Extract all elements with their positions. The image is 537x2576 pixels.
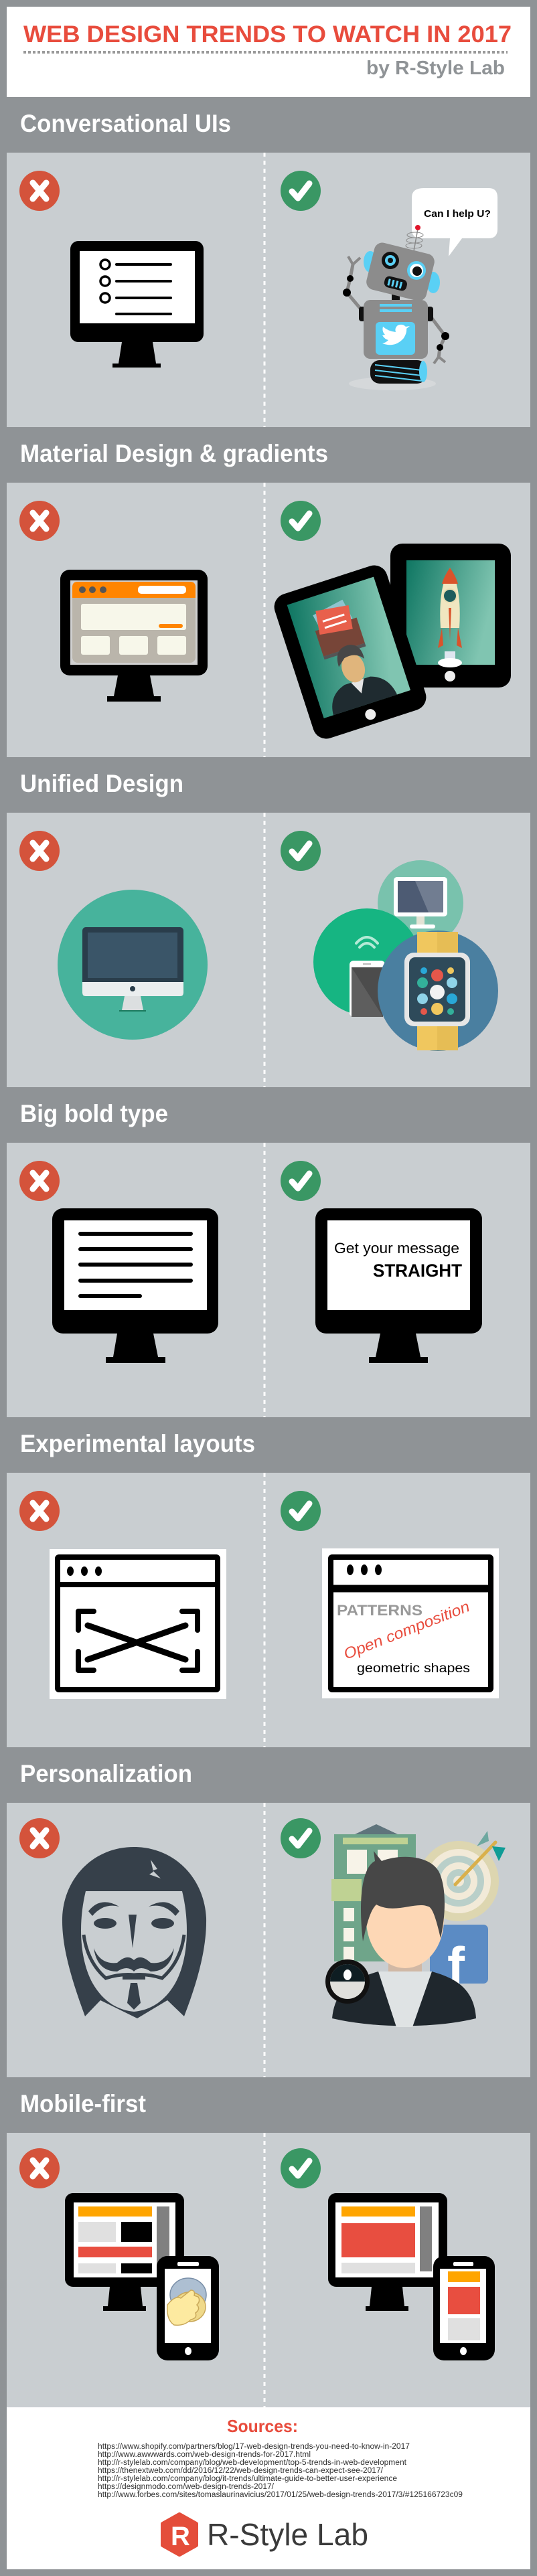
heading: Conversational UIs — [20, 110, 231, 137]
source links: https://www.shopify.com/partners/blog/17-web-design-trends-you-need-to-know-in-2017 — [98, 2443, 410, 2451]
monitor with big message: STRAIGHT — [373, 1261, 462, 1281]
section: Personalization — [7, 1760, 530, 2077]
window with experimental composition: PATTERNS — [337, 1602, 423, 1619]
monitor with small text lines — [52, 1208, 218, 1363]
desktop only circle — [58, 890, 208, 1040]
icon: cross — [19, 171, 60, 211]
window with experimental composition: geometric shapes — [357, 1662, 470, 1676]
section: Unified Design — [7, 770, 530, 1087]
logo: R-Style Lab — [207, 2517, 368, 2552]
icon: check — [281, 1818, 321, 1858]
mobile-first devices — [328, 2193, 495, 2360]
icon: check — [281, 1161, 321, 1201]
sources heading: Sources: — [227, 2416, 298, 2436]
window with experimental composition — [322, 1548, 499, 1698]
icon: cross — [19, 1818, 60, 1858]
source links: http://r-stylelab.com/company/blog/web-development/top-5-trends-in-web-development — [98, 2459, 407, 2467]
header — [7, 7, 530, 97]
icon: check — [281, 831, 321, 871]
source links: http://www.awwwards.com/web-design-trends-for-2017.html — [98, 2451, 311, 2459]
heading: Experimental layouts — [20, 1430, 255, 1457]
personalized user illustration — [325, 1824, 506, 2027]
section: Conversational UIs — [7, 110, 530, 427]
icon: check — [281, 171, 321, 211]
heading: Personalization — [20, 1760, 192, 1787]
icon: check — [281, 2148, 321, 2188]
icon: check — [281, 1491, 321, 1531]
window with expand arrows — [50, 1549, 226, 1699]
logo: R — [171, 2522, 190, 2551]
source links: http://r-stylelab.com/company/blog/it-trends/ultimate-guide-to-better-user-experience — [98, 2475, 397, 2483]
monitor with big message — [315, 1208, 482, 1363]
heading: Material Design & gradients — [20, 440, 328, 467]
source links: https://designmodo.com/web-design-trends-2017/ — [98, 2483, 275, 2491]
heading: Big bold type — [20, 1100, 168, 1127]
monitor with big message: Get your message — [334, 1240, 459, 1257]
section: Big bold type — [7, 1100, 530, 1417]
monitor with form — [70, 241, 204, 368]
heading: Unified Design — [20, 770, 183, 797]
icon: cross — [19, 1161, 60, 1201]
anonymous mask — [62, 1847, 206, 2018]
icon: cross — [19, 831, 60, 871]
subtitle: by R-Style Lab — [366, 58, 505, 79]
icon: cross — [19, 501, 60, 541]
icon: cross — [19, 2148, 60, 2188]
source links — [98, 2443, 463, 2499]
robot with speech bubble — [343, 188, 497, 390]
logo — [163, 2514, 368, 2555]
title: WEB DESIGN TRENDS TO WATCH IN 2017 — [23, 21, 512, 48]
multiple devices — [313, 860, 498, 1051]
footer: sources — [7, 2407, 530, 2569]
icon: check — [281, 501, 321, 541]
window with experimental composition: Open composition — [341, 1597, 472, 1663]
section: Material Design & gradients — [7, 440, 530, 757]
icon: cross — [19, 1491, 60, 1531]
robot with speech bubble: Can I help U? — [424, 208, 491, 220]
tablets with gradients — [271, 544, 511, 742]
monitor with flat UI — [60, 570, 208, 702]
source links: http://www.forbes.com/sites/tomaslaurinavicius/2017/01/25/web-design-trends-2017/3/#125166723c09 — [98, 2491, 463, 2499]
personalized user illustration: f — [447, 1936, 465, 1995]
section: Mobile-first — [7, 2090, 530, 2407]
desktop-first devices — [65, 2193, 219, 2360]
heading: Mobile-first — [20, 2090, 146, 2117]
section: Experimental layouts — [7, 1430, 530, 1747]
source links: https://thenextweb.com/dd/2016/12/22/web-design-trends-can-expect-see-2017/ — [98, 2467, 384, 2475]
